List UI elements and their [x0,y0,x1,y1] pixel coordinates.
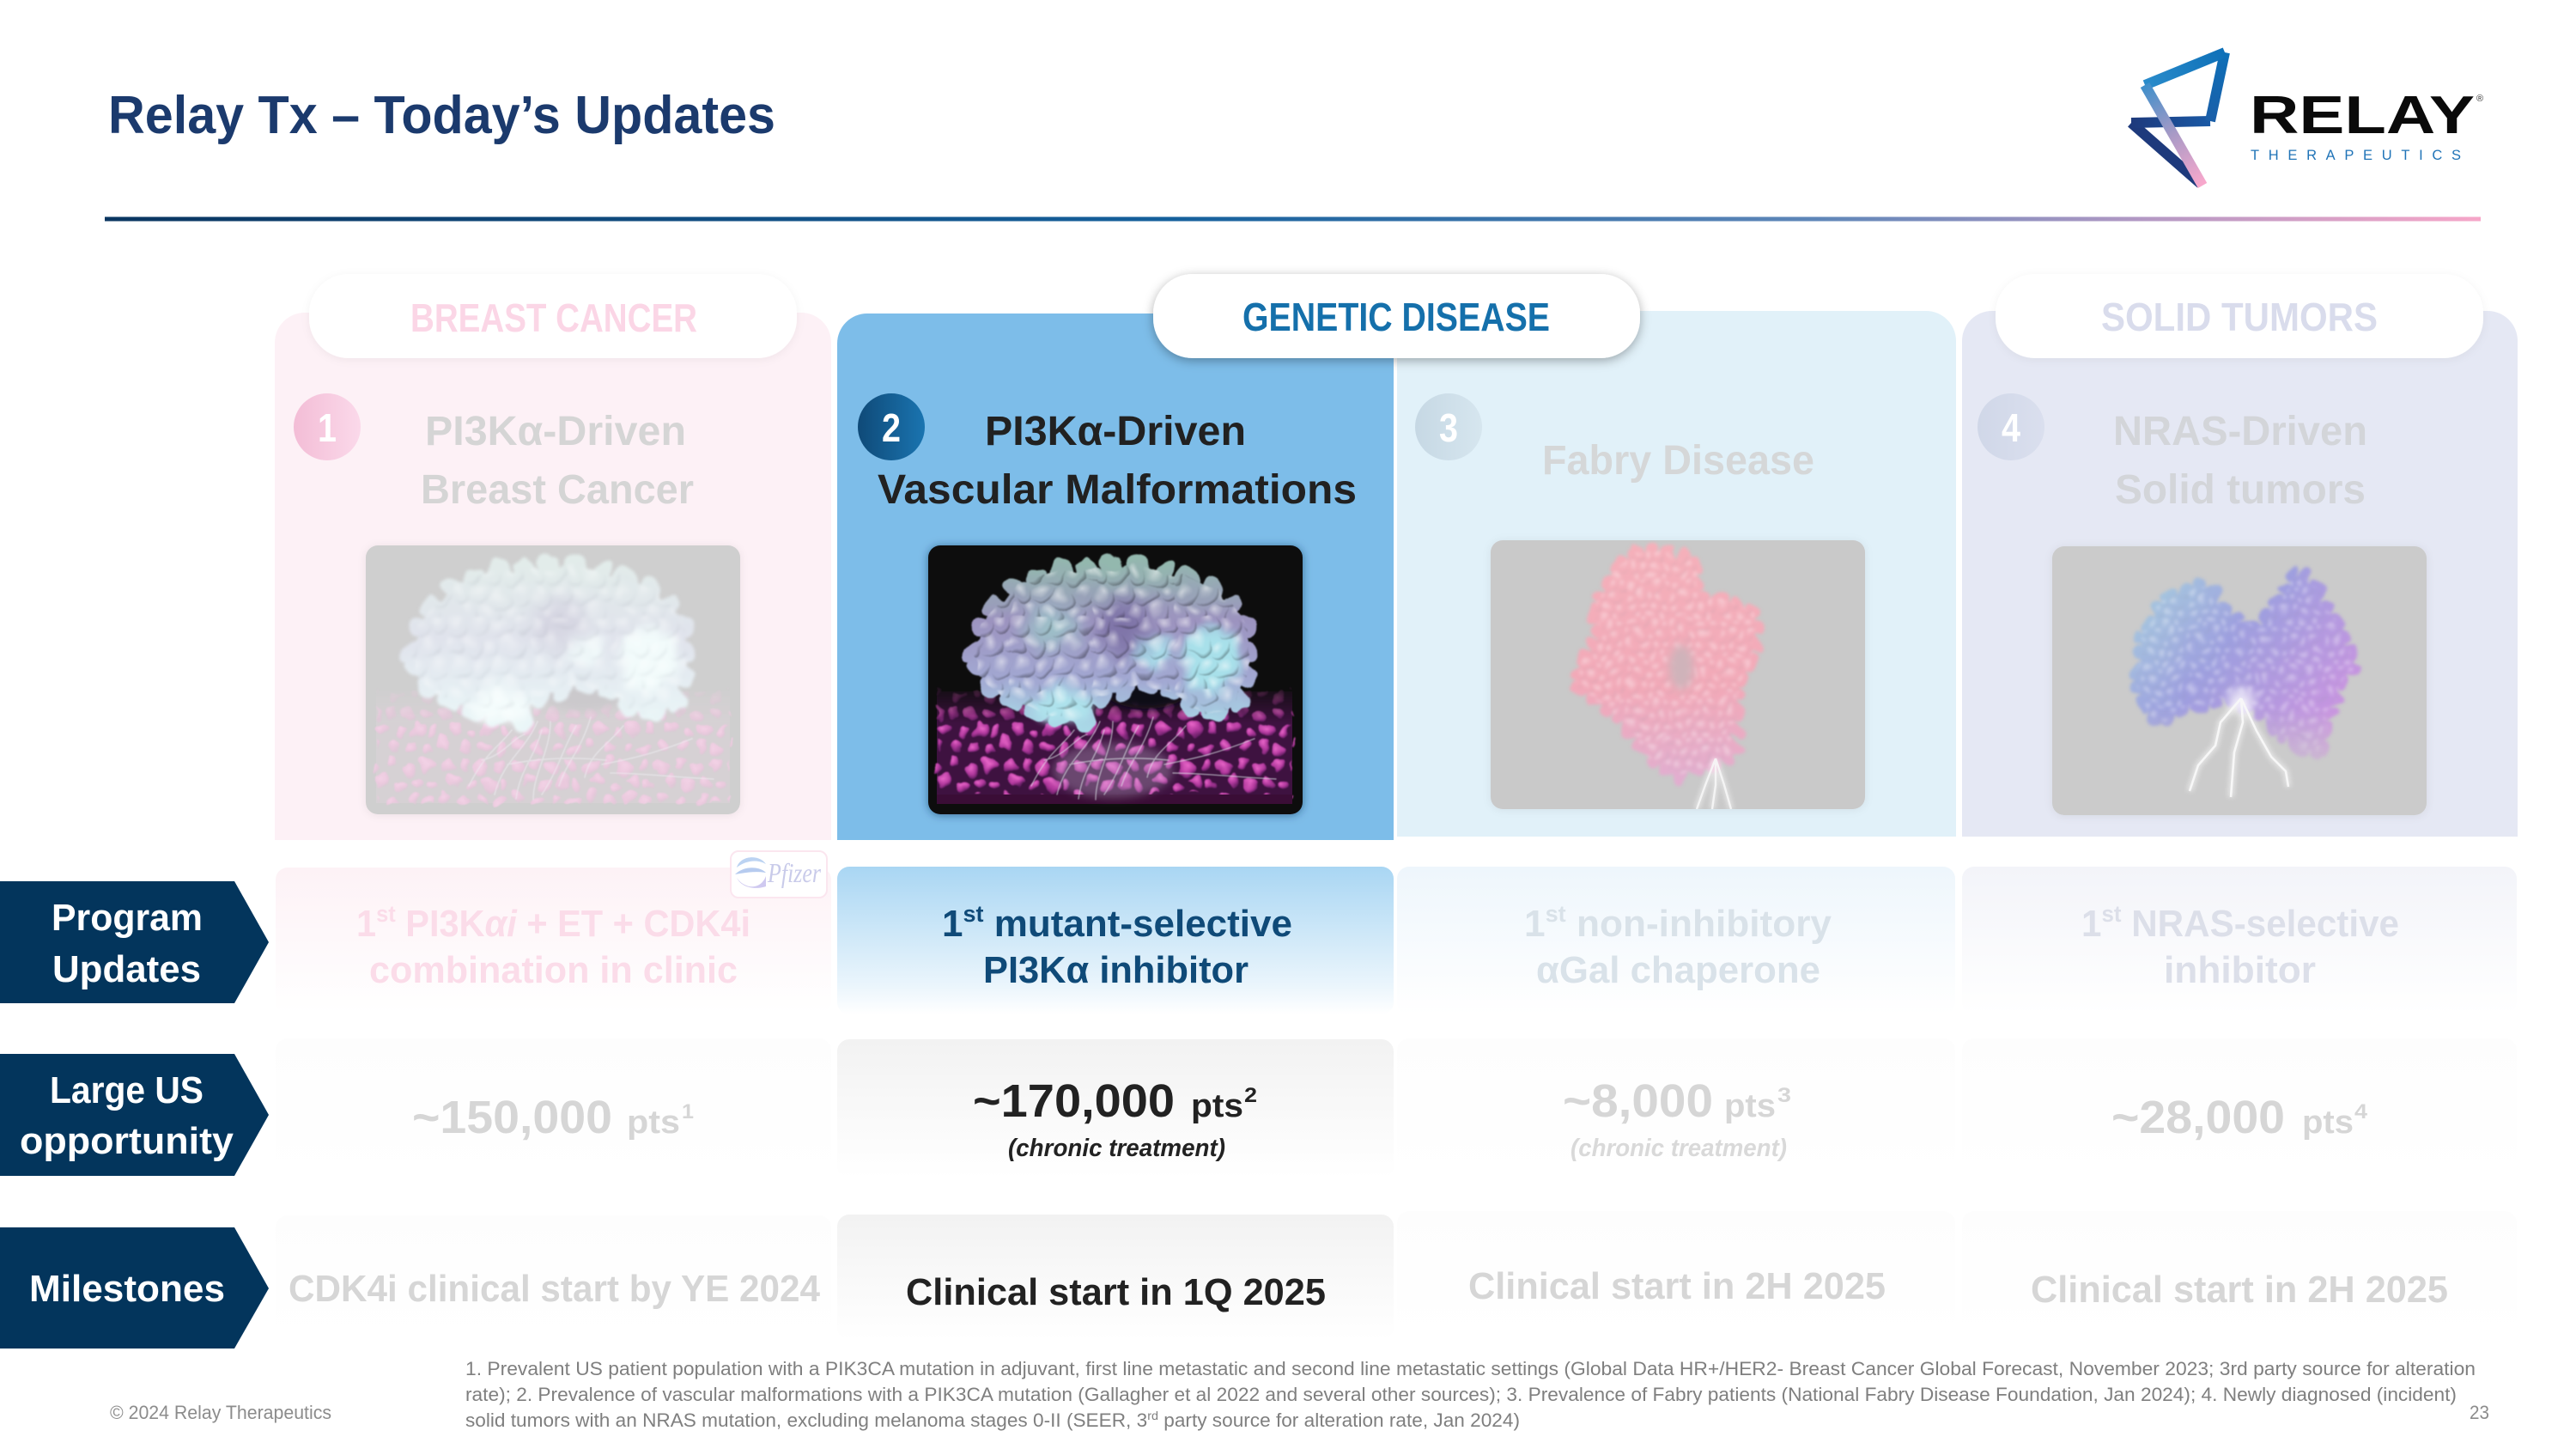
cell: fabry patients: (chronic treatment) [1571,1135,1787,1162]
pill: genetic disease [1153,274,1640,358]
row: program updates [0,867,2517,1014]
cell: vascular malformations milestone [837,1215,1394,1340]
registered mark: ® [2476,94,2483,104]
row label arrow: program updates [0,881,269,1003]
heading: PI3Kα-driven vascular malformations: PI3Kα-Driven [985,409,1246,454]
cell: breast cancer milestone: CDK4i clinical start by YE 2024 [289,1268,820,1310]
cell: NRAS milestone [1962,1211,2517,1340]
badge 3 [1415,393,1482,460]
pill: genetic disease: GENETIC DISEASE [1242,295,1550,339]
cell: vascular malformations update [837,867,1394,1014]
cell: fabry patients: pts [1724,1088,1776,1124]
cell: fabry update: αGal chaperone [1536,949,1820,991]
badge 4: 4 [2002,405,2020,450]
cell: vascular malformations patients [837,1039,1394,1178]
cell: vascular malformations update: 1 [942,903,963,945]
cell: fabry update [1397,867,1955,1014]
cell: NRAS patients: 4 [2354,1100,2368,1123]
cell: breast cancer patients [276,1038,831,1180]
heading: NRAS-driven solid tumors: Solid tumors [2115,467,2366,513]
row: milestones [0,1211,2517,1349]
cell: NRAS milestone: Clinical start in 2H 2025 [2031,1269,2448,1311]
logo: Relay Therapeutics [2131,52,2483,186]
copyright: © 2024 Relay Therapeutics [110,1402,331,1423]
title: Relay Tx – Today’s Updates [108,86,775,145]
row label arrow: large US opportunity [0,1054,269,1176]
heading: PI3Kα-driven breast cancer [421,409,694,513]
pill: breast cancer: BREAST CANCER [410,295,697,340]
cell: vascular malformations update: PI3Kα inhibitor [983,949,1249,991]
image: fabry protein with lightning (faded) [1491,540,1865,809]
cell: breast cancer update: αi + ET + CDK4i [485,903,764,945]
cell: vascular malformations update: mutant-selective [984,903,1292,945]
row label arrow: milestones: Milestones [29,1268,225,1310]
panel: breast cancer column [275,274,831,840]
cell: vascular malformations patients: pts [1191,1088,1243,1124]
heading: PI3Kα-driven breast cancer: Breast Cancer [421,467,694,513]
cell: breast cancer update [276,868,831,1014]
cell: breast cancer update: PI3K [396,903,485,945]
heading: PI3Kα-driven vascular malformations: Vascular Malformations [878,467,1357,513]
cell: NRAS patients [1962,1038,2517,1180]
pill: breast cancer [309,274,797,358]
cell: fabry milestone [1397,1211,1955,1340]
heading: fabry disease: Fabry Disease [1542,438,1814,484]
cell: NRAS update [1962,867,2517,1014]
footnotes: solid tumors with an NRAS mutation, excluding melanoma stages 0-II (SEER, 3 [465,1409,1129,1431]
cell: vascular malformations milestone: Clinical start in 1Q 2025 [906,1271,1326,1313]
cell: NRAS update: st [2101,901,2121,927]
cell: breast cancer update: combination in clinic [369,949,738,991]
row label arrow: large US opportunity: Large US [50,1069,204,1111]
cell: NRAS update: 1 [2081,903,2102,945]
cell: fabry patients [1397,1038,1955,1180]
panel: solid tumors column [1962,274,2518,837]
icon: relay bolt mark [2131,52,2225,186]
icon: pfizer swirl [735,857,766,888]
cell: fabry milestone: Clinical start in 2H 2025 [1468,1265,1886,1307]
cell: breast cancer patients: pts [627,1105,680,1141]
badge 3: 3 [1439,405,1458,450]
footnotes [465,1358,2476,1431]
row label arrow: program updates: Updates [52,948,201,990]
image: PI3Kα protein on membrane [928,545,1303,814]
pill: solid tumors: SOLID TUMORS [2101,295,2378,339]
footnotes: rd [1147,1409,1158,1422]
row label arrow: program updates: Program [52,897,203,939]
cell: NRAS update: inhibitor [2164,949,2316,991]
cell: fabry update: 1 [1524,903,1545,945]
partner logo: Pfizer [731,851,827,898]
row label arrow: large US opportunity: opportunity [20,1120,234,1162]
pill: solid tumors [1996,274,2483,358]
cell: breast cancer update: 1 [356,903,377,945]
badge 1: 1 [318,405,337,450]
footnotes: rate); 2. Prevalence of vascular malformations with a PIK3CA mutation (Gallagher et al 2022 and several other sources); 3. Prevalence of Fabry patients (National Fabry Disease Foundation, Jan 2024); 4. Newly diagnosed (incident) [465,1384,2457,1405]
heading: PI3Kα-driven breast cancer: PI3Kα-Driven [425,409,686,454]
page number: 23 [2470,1402,2489,1423]
badge 4 [1978,393,2044,460]
cell: NRAS update: NRAS-selective [2121,903,2399,945]
row label arrow: milestones [0,1227,269,1349]
heading: NRAS-driven solid tumors [2113,409,2367,513]
cell: fabry update: non-inhibitory [1566,903,1832,945]
cell: NRAS patients: pts [2302,1105,2354,1141]
panel: PI3Kα vascular malformations column (highlighted) [837,314,1394,840]
badge 2 [858,393,925,460]
badge 2: 2 [882,405,901,450]
image: NRAS protein with lightning (faded) [2052,546,2427,815]
logo tagline: THERAPEUTICS [2251,148,2461,163]
cell: breast cancer milestone [276,1215,831,1340]
cell: fabry update: st [1546,901,1566,927]
cell: NRAS patients: ~28,000 [2111,1092,2285,1143]
cell: vascular malformations update: st [963,901,984,927]
cell: breast cancer patients: 1 [682,1100,694,1123]
cell: vascular malformations patients: (chronic treatment) [1008,1135,1225,1162]
pfizer wordmark: Pfizer [767,857,821,888]
image: PI3Kα protein on membrane (faded) [366,545,740,814]
logo wordmark: RELAY [2250,86,2475,145]
footnotes: 1. Prevalent US patient population with a PIK3CA mutation in adjuvant, first line metastatic and second line metastatic settings (Global Data HR+/HER2- Breast Cancer Global Forecast, November 2023; 3rd party source for alteration [465,1358,2476,1379]
footnotes: party source for alteration rate, Jan 2024) [1158,1409,1520,1431]
cell: vascular malformations patients: 2 [1244,1084,1257,1107]
cell: breast cancer patients: ~150,000 [412,1092,612,1143]
heading: NRAS-driven solid tumors: NRAS-Driven [2113,409,2367,454]
row: large US opportunity [0,1038,2517,1180]
cell: breast cancer update: st [376,901,396,927]
cell: fabry patients: 3 [1777,1084,1791,1107]
panel: fabry disease column [1397,311,1956,837]
cell: fabry patients: ~8,000 [1563,1075,1713,1127]
badge 1 [294,393,361,460]
cell: vascular malformations patients: ~170,000 [973,1075,1175,1127]
heading: PI3Kα-driven vascular malformations [878,409,1357,513]
